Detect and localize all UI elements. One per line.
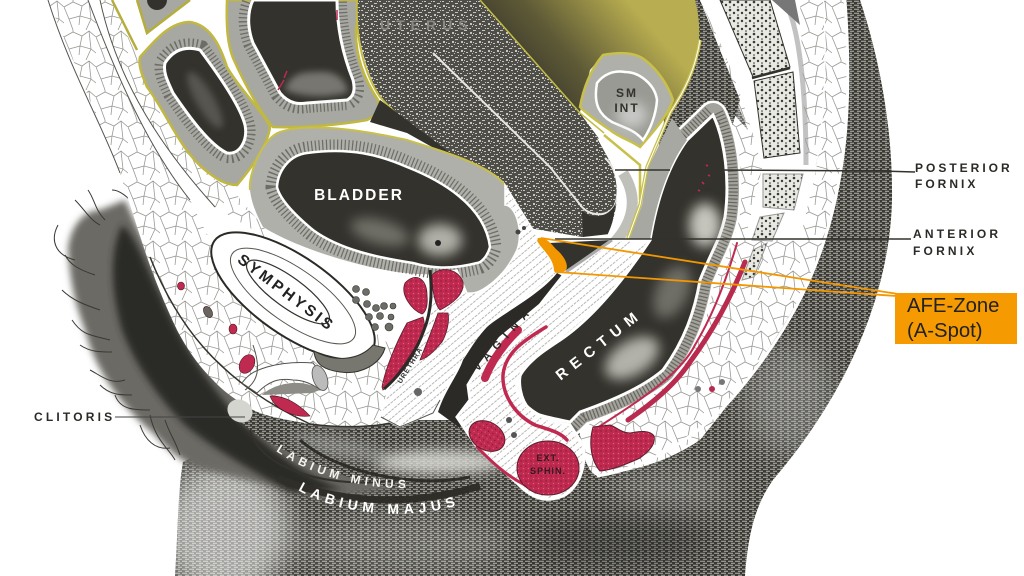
bladder [250,127,523,293]
external sphincter [517,441,579,495]
uterus label: UTERUS [380,17,474,33]
muscle strips around vagina and anal canal [477,327,567,485]
cervix peritoneal band [597,40,700,255]
posterior fornix leader [615,170,915,172]
peri-urethral muscle [382,270,463,390]
AFE-zone callout box: (A-Spot) [907,320,983,342]
posterior vaginal wall and anal canal [457,240,650,499]
anterior fornix label: ANTERIOR [913,227,1001,241]
anterior sphincter muscle [464,414,510,458]
clitoris leader [115,416,245,418]
intra-abdominal background [112,0,590,230]
urethra and anterior vaginal wall [380,185,557,427]
hatched tissue behind rectum [670,25,748,130]
symphysis label: SYMPHYSIS [234,251,338,335]
labium majus label: LABIUM MAJUS [298,482,455,514]
anterior fornix dark space [549,240,612,270]
vagina label: VAGINA [471,303,536,374]
sacral vertebrae [720,0,803,280]
symphysis pubis [192,209,394,383]
small intestine section: SM [616,86,638,100]
olive peritoneal region [480,0,699,125]
pubic hair [54,190,440,500]
clitoris label: CLITORIS [34,410,115,424]
vaginal canal gap [438,273,580,428]
urethra and anterior vaginal wall: URETHRA [397,346,425,385]
rectum [520,115,727,422]
body silhouette [160,0,892,576]
small vessels [178,282,310,416]
pubic ramus tissue [242,345,385,395]
urethra [384,270,431,389]
uterus cavity line [433,53,618,214]
intestine loop top [112,0,190,50]
posterior wall fat and sacrum [578,0,848,476]
AFE-zone callout box: AFE-Zone [907,295,999,317]
posterior anal muscle [591,425,654,471]
bladder label: BLADDER [314,187,404,204]
clitoris [223,395,257,427]
uterus [357,0,618,237]
labia region [228,403,520,500]
posterior fornix label: POSTERIOR [915,161,1013,175]
venous plexus [352,286,396,331]
anterior abdominal wall fat [48,0,420,427]
AFE-zone callout leaders [541,238,898,296]
posterior rectal muscle strips [597,243,745,428]
intestine loop centre [227,0,379,127]
labium minus label: LABIUM MINUS [276,444,406,488]
external sphincter: EXT. [536,453,560,463]
fat vessels [695,379,725,392]
AFE-zone callout box [895,293,1017,344]
AFE-zone highlight [537,238,567,273]
rectum label: RECTUM [553,305,647,384]
posterior fornix label: FORNIX [915,177,978,191]
external sphincter: SPHIN. [530,466,566,476]
small intestine section [580,53,673,147]
intestine loop left [139,22,270,185]
anterior fornix leader [555,238,911,240]
small intestine section: INT [614,101,640,115]
anterior fornix label: FORNIX [913,244,978,258]
blood specks [698,165,710,191]
